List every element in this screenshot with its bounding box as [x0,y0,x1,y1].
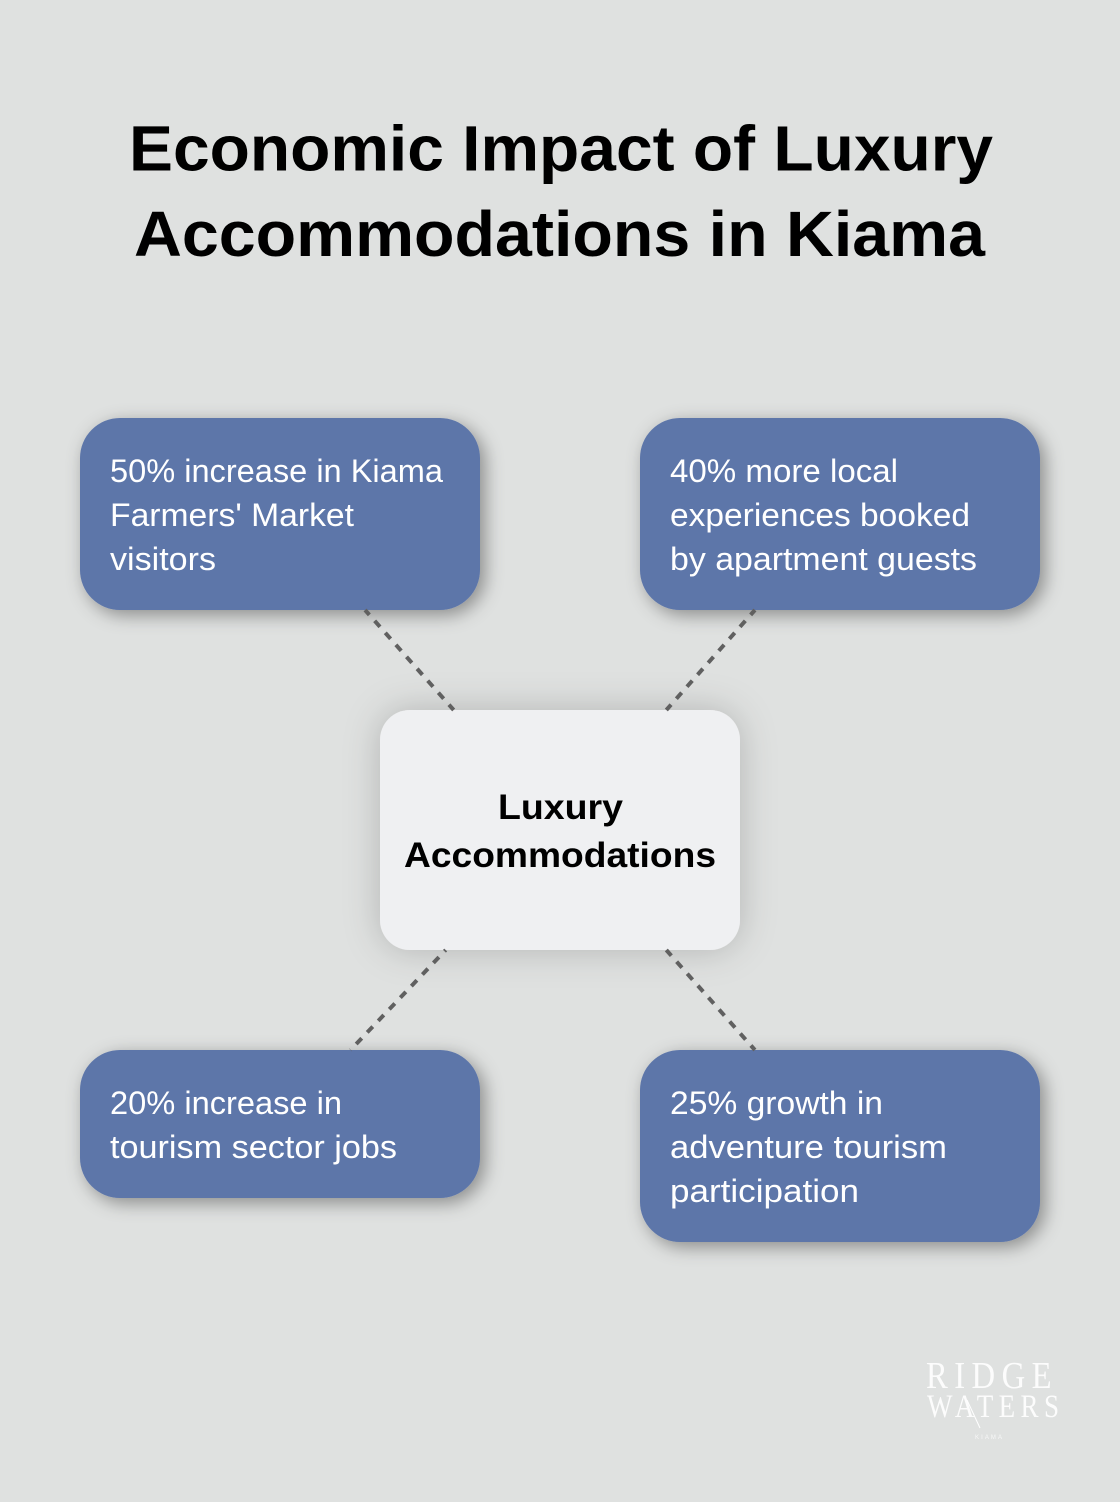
title [129,112,993,270]
panel: 40% local experiences [640,418,1040,610]
panel: center luxury accommodations: Luxury [498,788,624,827]
panel: center luxury accommodations [380,710,740,950]
panel: center luxury accommodations: Accommodations [404,836,716,875]
panel: 40% local experiences: experiences booked [670,497,970,533]
panel: 50% farmers market: visitors [110,541,216,577]
logo: Ridge Waters Kiama: KIAMA [975,1435,1002,1441]
logo: Ridge Waters Kiama [926,1354,1059,1441]
panel: 40% local experiences: by apartment guests [670,541,977,577]
panel: 20% tourism jobs [80,1050,480,1198]
panel: 25% adventure tourism [640,1050,1040,1242]
panel: 50% farmers market: Farmers' Market [110,497,354,533]
connector: top right [666,610,755,710]
connector: bottom left [350,950,446,1050]
logo: Ridge Waters Kiama: RIDGE [926,1354,1052,1397]
panel: 20% tourism jobs: 20% increase in [110,1085,342,1121]
logo: Ridge Waters Kiama: WATERS [927,1387,1059,1425]
panel: 50% farmers market [80,418,480,610]
panel: 50% farmers market: 50% increase in Kiama [110,453,443,489]
connector: top left [365,610,454,710]
title: Economic Impact of Luxury [129,112,993,184]
panel: 25% adventure tourism: 25% growth in [670,1085,883,1121]
panel: 25% adventure tourism: adventure tourism [670,1129,947,1165]
panel: 20% tourism jobs: tourism sector jobs [110,1129,397,1165]
panel: 25% adventure tourism: participation [670,1173,859,1209]
connector: bottom right [666,950,755,1050]
title: Accommodations in Kiama [134,198,985,270]
panel: 40% local experiences: 40% more local [670,453,898,489]
